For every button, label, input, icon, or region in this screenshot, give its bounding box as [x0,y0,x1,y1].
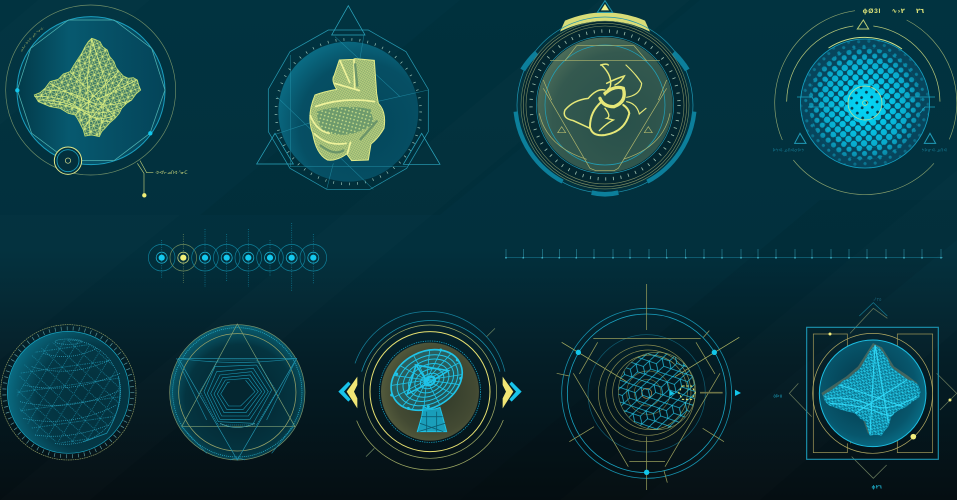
sphere disc [278,42,418,182]
header code: ٢٦ [916,8,924,15]
node row [148,223,327,292]
wireframe mountain [34,38,141,137]
left code: ᐅᔭᐊ·ᓄᑎᐊᓂᐅᔭ [773,148,804,153]
target circle [54,147,82,174]
cyan wireframe mountain [821,343,921,436]
node 7 [278,223,305,292]
panel: framed cyan mountain [773,297,957,491]
disc [17,17,165,165]
right chevrons [503,377,522,408]
header code: ∿›٢ [892,8,905,15]
left code: ٥ᐅ٥ [773,394,783,399]
dish disc [381,343,479,441]
node 8 [300,234,327,284]
cyan nodes [576,350,741,475]
panel: anatomical knee mesh [257,6,440,189]
node 5 [235,229,262,287]
header code: ϕØ3Ι [863,8,881,15]
outer square [807,327,938,459]
panel: creature scanner [516,1,694,194]
dotted mesh [16,338,121,445]
left chevrons [338,377,357,408]
node 2 [170,234,197,283]
node 6 [257,240,283,276]
top code: ᓯ٢٥ [873,297,882,302]
node 4 [213,234,240,282]
micro label: ·ᐅᐊᔭ·ᓄᑎᐊ·ᕐᓂᑕ [155,170,188,175]
panel: dotted globe [1,325,136,460]
crossing lines [562,337,739,382]
geometric overlay [539,46,670,171]
concentric rings [598,345,695,442]
rings [355,311,505,470]
halftone globe [797,36,935,168]
cyan nodes [15,88,152,135]
bottom code: ϕ٢٦ [872,485,882,491]
construction lines [273,35,428,189]
node 1 [148,240,175,278]
knee wireframe [310,59,385,161]
arcs [775,11,957,195]
dark core [223,380,252,404]
triangle markers [795,20,936,143]
disc [7,331,129,453]
dashed hexagon [679,386,695,399]
callout connector [137,161,153,197]
antenna wireframe [381,338,473,432]
central disc [537,37,673,173]
inner brackets [813,334,933,453]
tick ring [4,328,132,456]
chevron marks [789,308,957,478]
khaki frame [557,284,724,490]
top marker triangle [597,1,613,12]
panel: hexagram disc [170,324,305,460]
blue arc segments [516,53,694,194]
tick ring [531,31,679,179]
yellow nodes [828,332,951,439]
cube mesh sphere [617,350,697,430]
tick ring [276,39,421,184]
octagon frame [17,20,165,161]
panel: wireframe mountain gauge [5,4,188,198]
hexagram [177,324,297,460]
triangles [257,6,440,164]
panel: halftone sphere [773,8,957,195]
node 3 [192,229,218,287]
creature [564,64,646,135]
outer ring [517,17,693,193]
dark tick band [521,21,689,189]
disc [819,340,926,447]
timeline ruler [505,249,943,258]
right code: ᔭᐅᓂᐊ·ᓄᑎᐊ [922,148,947,153]
panel: radar dish [338,311,522,470]
top yellow arc [560,12,650,32]
nested hexagons [200,360,277,427]
panel: polyhedral sphere target [557,284,741,490]
polygon frame [268,30,428,189]
rings [562,308,732,478]
